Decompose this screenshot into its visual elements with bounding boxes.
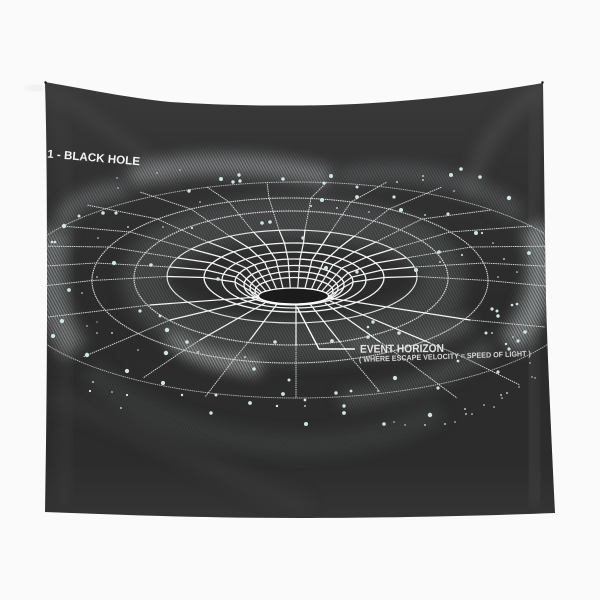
tapestry panel [45, 82, 555, 518]
funnel rings (solid) [204, 243, 384, 312]
fabric base [45, 82, 555, 518]
label: event horizon: EVENT HORIZON [360, 343, 444, 356]
event horizon pointer line [297, 307, 355, 349]
wall shadow near left pin [25, 86, 47, 90]
stars: small [81, 169, 536, 426]
funnel spokes (solid) [150, 230, 470, 345]
nebula band with hatching [50, 164, 541, 445]
label: event horizon definition: ( WHERE ESCAPE VELOCITY = SPEED OF LIGHT ) [359, 349, 531, 364]
black hole opening [258, 288, 328, 304]
stars: large [51, 167, 531, 426]
outer grid spokes (dotted) [47, 182, 546, 398]
title: 1 - BLACK HOLE [47, 149, 141, 168]
outer grid rings (dotted) [47, 182, 548, 398]
fabric folds [48, 86, 540, 505]
hanging pins [44, 81, 544, 84]
infographic: black hole tapestry [30, 81, 555, 518]
middle grid ring [167, 230, 417, 323]
